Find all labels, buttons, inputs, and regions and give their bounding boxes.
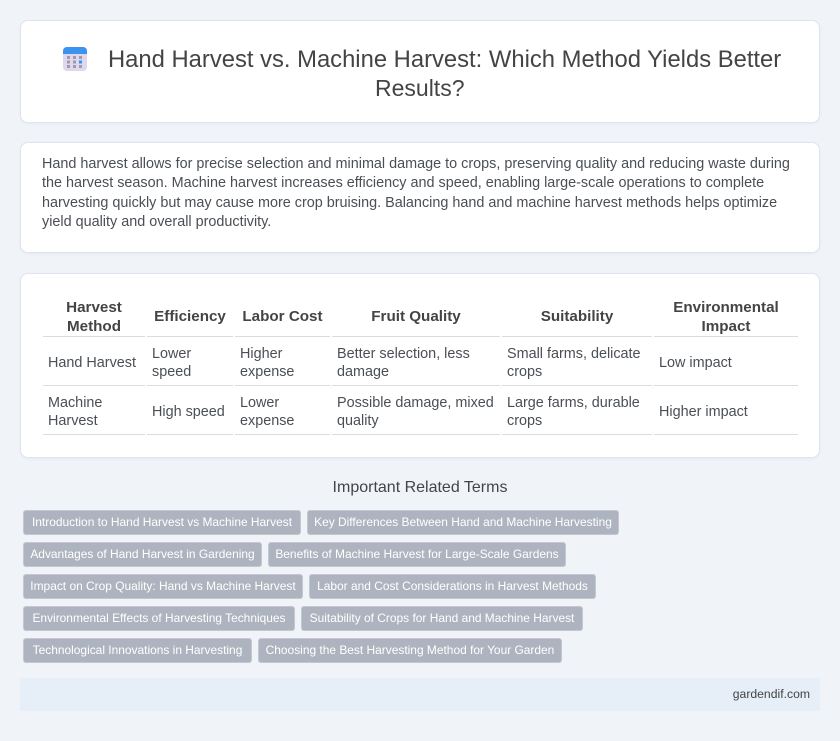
tag list: related terms xyxy=(23,510,619,663)
table row: machine harvest: Higher impact xyxy=(659,404,748,420)
tag list: related terms: Key Differences Between Hand and Machine Harvesting xyxy=(314,515,612,529)
table headers: Suitability xyxy=(541,308,613,325)
text block: summary xyxy=(42,156,790,230)
footer text: gardendif.com xyxy=(733,687,810,701)
title xyxy=(108,46,781,101)
table row: hand harvest: Better selection, less xyxy=(337,346,470,362)
footer bar xyxy=(20,678,820,711)
table row: machine harvest: Machine xyxy=(48,395,102,411)
text block: summary: Hand harvest allows for precise selection and minimal damage to crops, preserving quality and reducing waste during xyxy=(42,156,790,172)
title: Hand Harvest vs. Machine Harvest: Which Method Yields Better xyxy=(108,46,781,73)
tag list: related terms: Choosing the Best Harvesting Method for Your Garden xyxy=(266,643,554,657)
panel: title header xyxy=(20,20,820,123)
table row: machine harvest: Possible damage, mixed xyxy=(337,395,494,411)
table row: hand harvest: Small farms, delicate xyxy=(507,346,641,362)
table row: hand harvest: Hand Harvest xyxy=(48,355,136,371)
table row: machine harvest: quality xyxy=(337,413,379,429)
table headers: Labor Cost xyxy=(242,308,323,325)
table headers: Environmental xyxy=(673,299,779,316)
table row: machine harvest xyxy=(48,395,748,429)
table row: hand harvest: Lower xyxy=(152,346,191,362)
tag list: related terms: Advantages of Hand Harvest in Gardening xyxy=(30,547,255,561)
text block: summary: the harvest season. Machine harvest increases efficiency and speed, enabling large-scale operations to complete xyxy=(42,175,764,191)
table headers: Harvest xyxy=(66,299,122,316)
tag list: related terms: Labor and Cost Considerations in Harvest Methods xyxy=(317,579,588,593)
panel: summary paragraph xyxy=(20,142,820,253)
table row: machine harvest: expense xyxy=(240,413,294,429)
heading: related terms: Important Related Terms xyxy=(333,479,507,496)
table headers: Impact xyxy=(702,318,750,335)
table row: hand harvest: expense xyxy=(240,364,294,380)
table row: machine harvest: crops xyxy=(507,413,542,429)
title: Results? xyxy=(375,75,464,101)
text block: summary: harvesting quickly but may cause more crop bruising. Balancing hand and machine harvest methods helps optimize xyxy=(42,194,777,210)
tag list: related terms: Environmental Effects of Harvesting Techniques xyxy=(32,611,286,625)
table row: machine harvest: Large farms, durable xyxy=(507,395,640,411)
tag list: related terms: Impact on Crop Quality: Hand vs Machine Harvest xyxy=(30,579,296,593)
table row: machine harvest: Harvest xyxy=(48,413,98,429)
table row: machine harvest: Lower xyxy=(240,395,279,411)
table row: hand harvest: speed xyxy=(152,364,191,380)
table headers xyxy=(66,299,779,335)
icon: calendar xyxy=(63,47,87,71)
tag list: related terms: Introduction to Hand Harvest vs Machine Harvest xyxy=(32,515,292,529)
table headers: Fruit Quality xyxy=(371,308,461,325)
table headers: Method xyxy=(67,318,121,335)
text block: summary: yield quality and overall productivity. xyxy=(42,214,271,230)
panel: comparison table xyxy=(20,273,820,458)
table row: machine harvest: High speed xyxy=(152,404,225,420)
table row: hand harvest: Higher xyxy=(240,346,282,362)
table headers: Efficiency xyxy=(154,308,226,325)
table row: hand harvest: crops xyxy=(507,364,542,380)
table row: hand harvest xyxy=(48,346,732,380)
table row: hand harvest: Low impact xyxy=(659,355,732,371)
tag list: related terms: Benefits of Machine Harvest for Large-Scale Gardens xyxy=(275,547,559,561)
tag list: related terms: Technological Innovations in Harvesting xyxy=(33,643,242,657)
tag list: related terms: Suitability of Crops for Hand and Machine Harvest xyxy=(310,611,574,625)
table row: hand harvest: damage xyxy=(337,364,389,380)
